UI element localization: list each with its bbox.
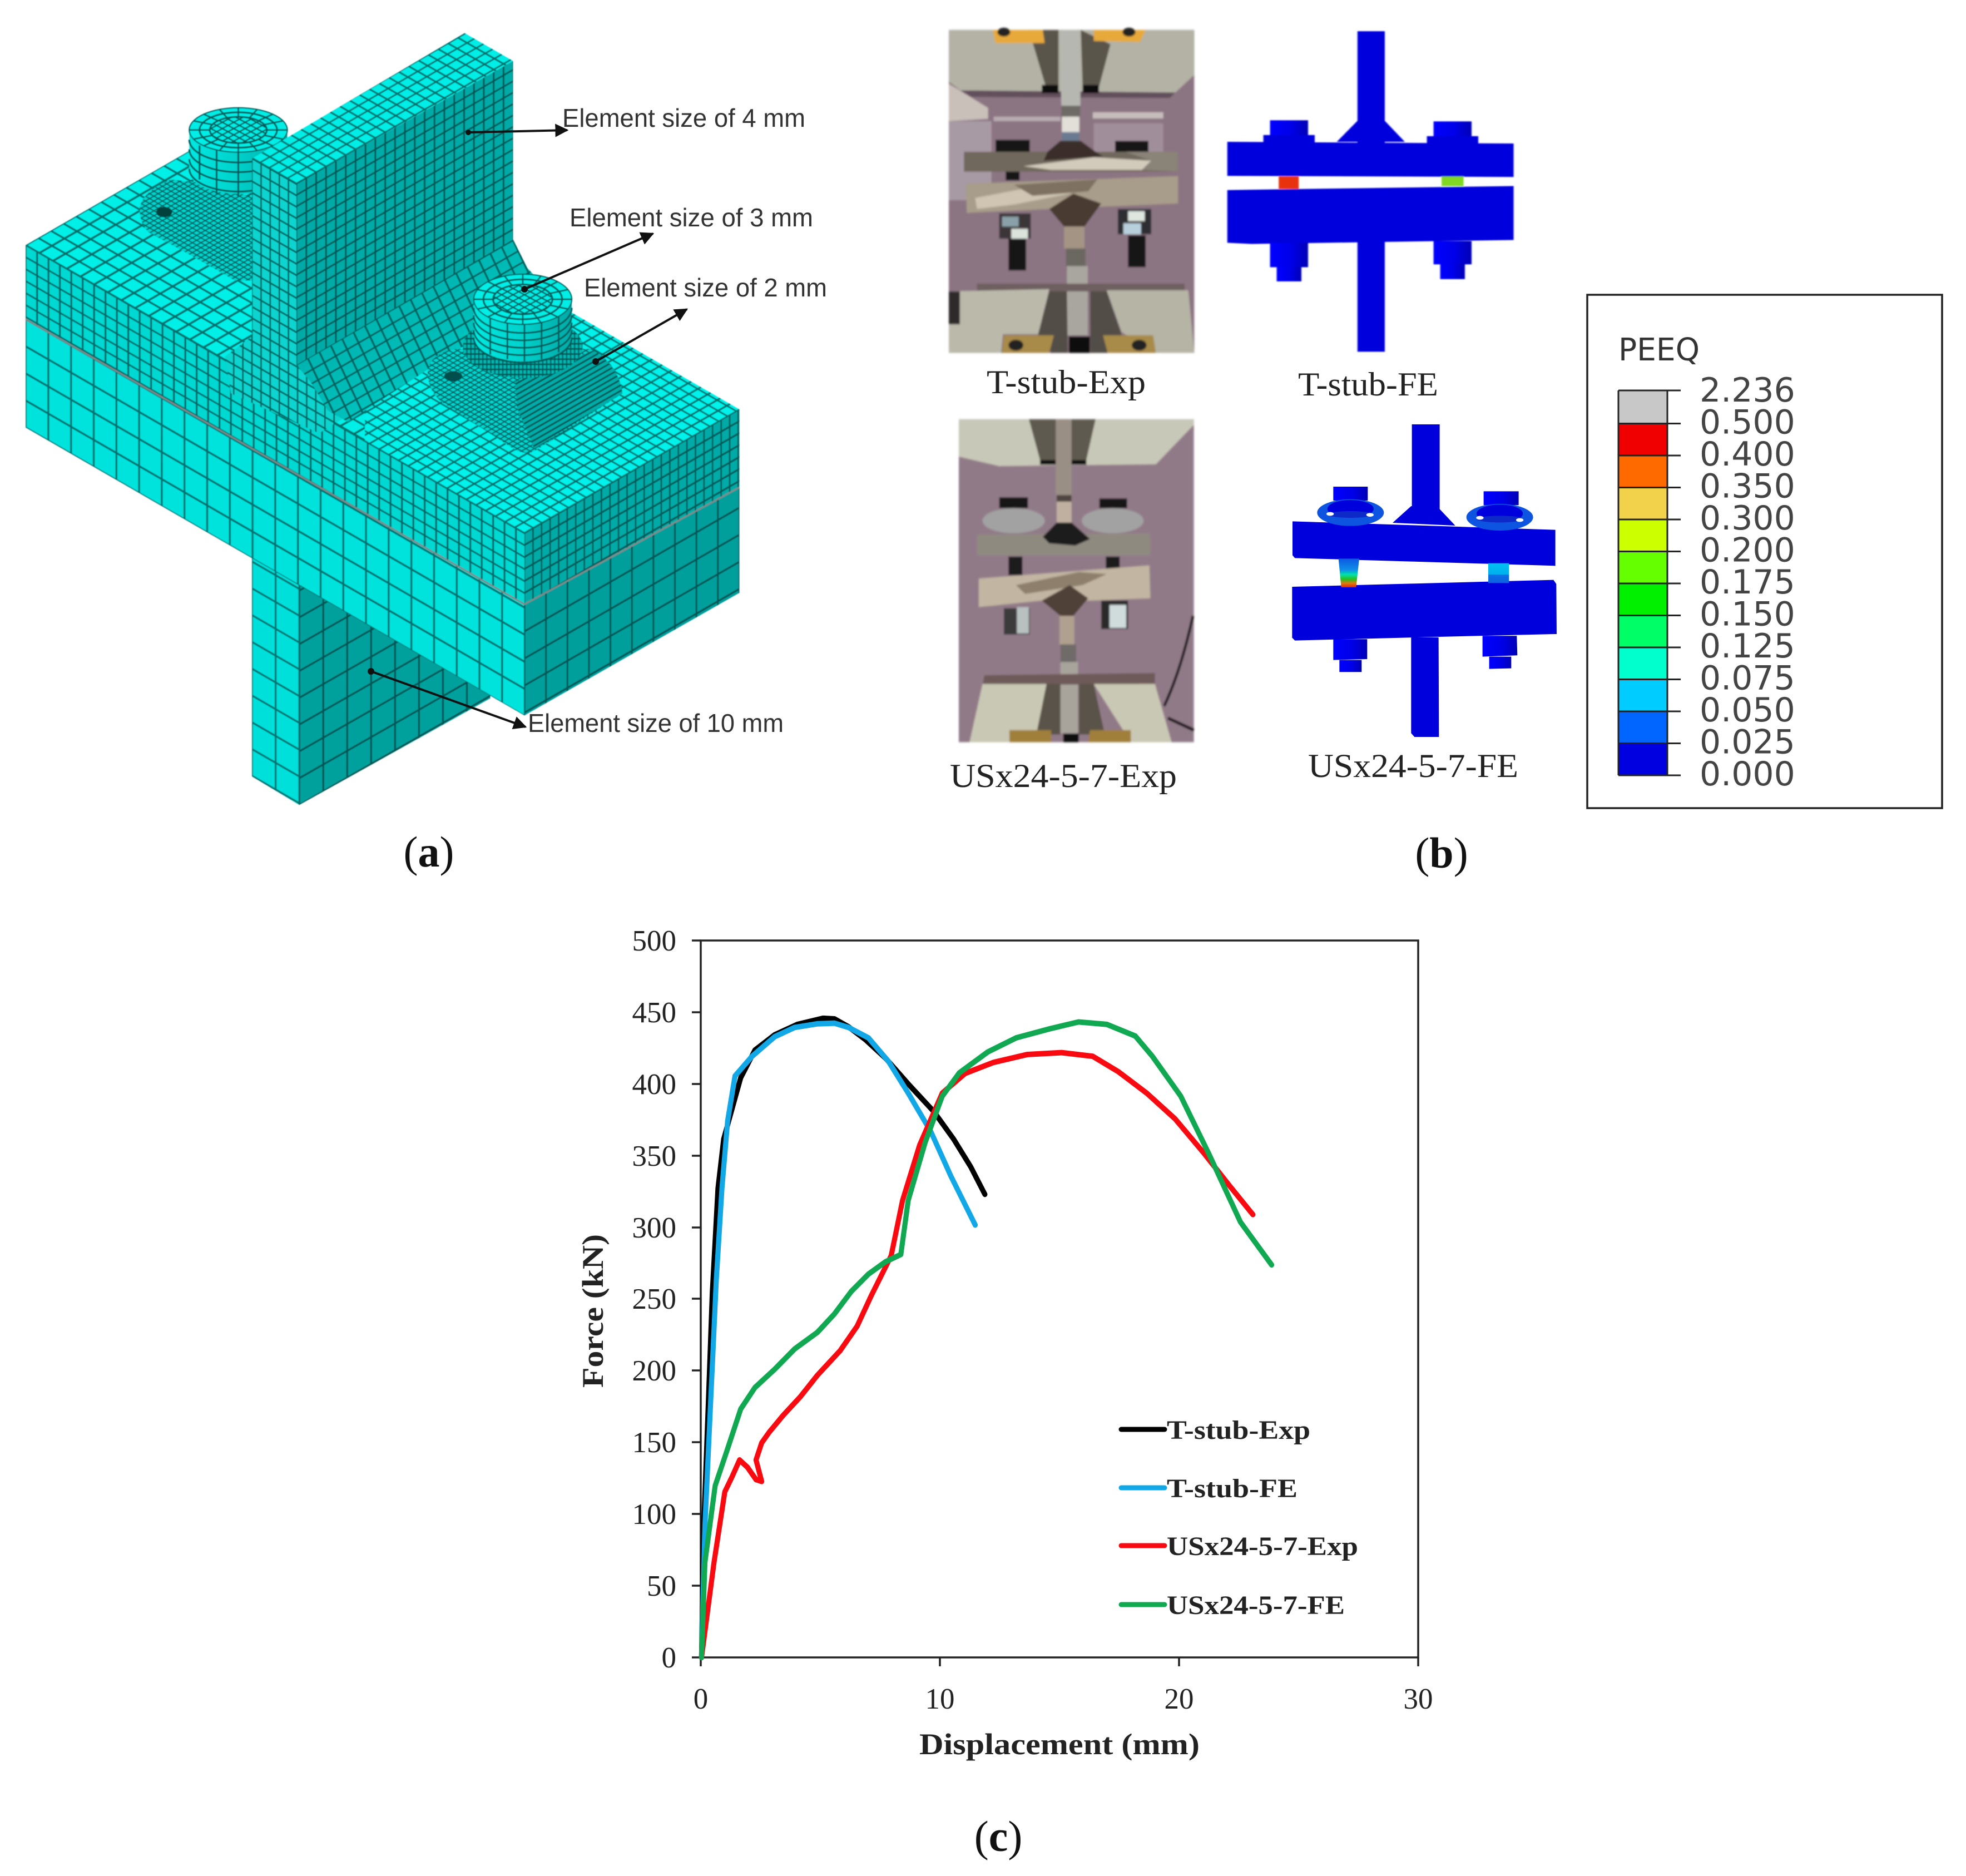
panel c: force-displacement chart [576,925,1433,1860]
caption: T-stub-Exp: T-stub-Exp [987,364,1146,400]
legend: PEEQ colour scale: 0.025 [1700,723,1795,762]
y axis tick labels: 350 [632,1140,676,1172]
y axis tick labels: 200 [632,1355,676,1387]
label: element size 10 mm: Element size of 10 mm [528,709,784,737]
legend: PEEQ colour scale: PEEQ [1618,332,1700,368]
y axis tick labels: 500 [632,925,676,957]
label: element size 2 mm: Element size of 2 mm [584,273,827,302]
plate top surface right [26,121,739,533]
y axis title: Force (kN) [576,1234,610,1388]
caption (c): (c) [974,1812,1022,1860]
right bolt slotted plate [428,349,622,453]
x axis tick labels: 10 [925,1683,954,1715]
y axis tick labels: 450 [632,997,676,1029]
mesh solid model [26,33,739,805]
curve: USx24-5-7-FE [701,1022,1271,1657]
legend: PEEQ colour scale: 0.075 [1700,659,1795,697]
legend: PEEQ colour scale: 0.050 [1700,691,1795,730]
left bolt slotted plate [140,180,252,280]
x axis tick labels [694,1683,1433,1715]
y axis tick labels: 300 [632,1212,676,1244]
plate coarse right face [524,487,739,715]
panel b: experimental photos, FE contours and legend [949,28,1942,877]
caption: T-stub-FE: T-stub-FE [1298,366,1438,403]
label: element size 2 mm [584,273,827,365]
FE model: T-stub-FE contour [1227,31,1514,352]
weld fillet right mesh [296,239,548,422]
mesh layer seam [26,319,739,604]
legend: USx24-5-7-Exp: USx24-5-7-Exp [1167,1532,1358,1561]
x axis tick labels: 20 [1165,1683,1194,1715]
web end face [252,159,296,365]
y axis tick labels [632,925,676,1674]
photo: USx24-5-7 experiment [959,419,1194,742]
caption (b): (b) [1415,829,1468,877]
legend: PEEQ colour scale: 0.000 [1700,755,1795,794]
caption: USx24-5-7-FE: USx24-5-7-FE [1308,748,1518,784]
legend: USx24-5-7-FE: USx24-5-7-FE [1167,1591,1345,1620]
y axis tick labels: 100 [632,1498,676,1531]
legend: PEEQ colour scale: 0.350 [1700,467,1795,506]
y axis tick labels: 250 [632,1283,676,1315]
label: element size 4 mm: Element size of 4 mm [562,103,805,132]
label: element size 3 mm [521,203,813,293]
legend: PEEQ colour scale: 0.500 [1700,403,1795,442]
right bolt head [474,274,572,363]
x axis title: Displacement (mm) [919,1727,1200,1761]
weld fillet right base [296,239,548,422]
legend: T-stub-FE: T-stub-FE [1167,1474,1298,1503]
legend: PEEQ colour scale: 0.400 [1700,435,1795,474]
x axis tick labels: 0 [694,1683,708,1715]
legend: PEEQ colour scale: 0.175 [1700,563,1795,602]
legend: PEEQ colour scale: 2.236 [1700,371,1795,410]
weld fillet left [225,336,342,433]
legend: PEEQ colour scale: 0.150 [1700,595,1795,634]
legend: T-stub-Exp: T-stub-Exp [1167,1415,1310,1445]
x axis tick labels: 30 [1404,1683,1433,1715]
lower web light end face [252,542,299,805]
y axis tick labels: 50 [647,1570,676,1602]
curve: USx24-5-7-Exp [701,1053,1253,1657]
plate fine right face [524,409,739,604]
panel a: finite element mesh model [26,33,827,876]
data curves [701,1018,1271,1657]
plate top surface left [26,121,365,440]
left bolt head [189,108,288,197]
lower web dark side face [299,570,491,805]
y axis tick labels: 0 [662,1642,676,1674]
legend: PEEQ colour scale: 0.300 [1700,499,1795,538]
chart legend [1121,1415,1358,1620]
curve: T-stub-Exp [701,1018,985,1657]
legend: PEEQ colour scale [1587,295,1942,808]
caption: USx24-5-7-Exp: USx24-5-7-Exp [950,758,1177,794]
FE model: USx24-5-7-FE contour [1292,424,1557,737]
caption (a): (a) [404,828,454,876]
web right face [296,61,513,365]
label: element size 10 mm [368,668,784,737]
right bolt washer [463,315,583,378]
plate coarse front face [26,319,524,715]
legend: PEEQ colour scale: 0.125 [1700,627,1795,666]
y axis tick labels: 150 [632,1427,676,1459]
curve: T-stub-FE [701,1023,975,1657]
plate fine front face [26,245,524,604]
photo: T-stub experiment [949,28,1194,353]
legend: PEEQ colour scale: 0.200 [1700,531,1795,570]
plot frame and ticks [692,941,1418,1666]
y axis tick labels: 400 [632,1068,676,1101]
label: element size 4 mm [465,103,805,135]
web top face [252,33,513,184]
label: element size 3 mm: Element size of 3 mm [570,203,813,232]
